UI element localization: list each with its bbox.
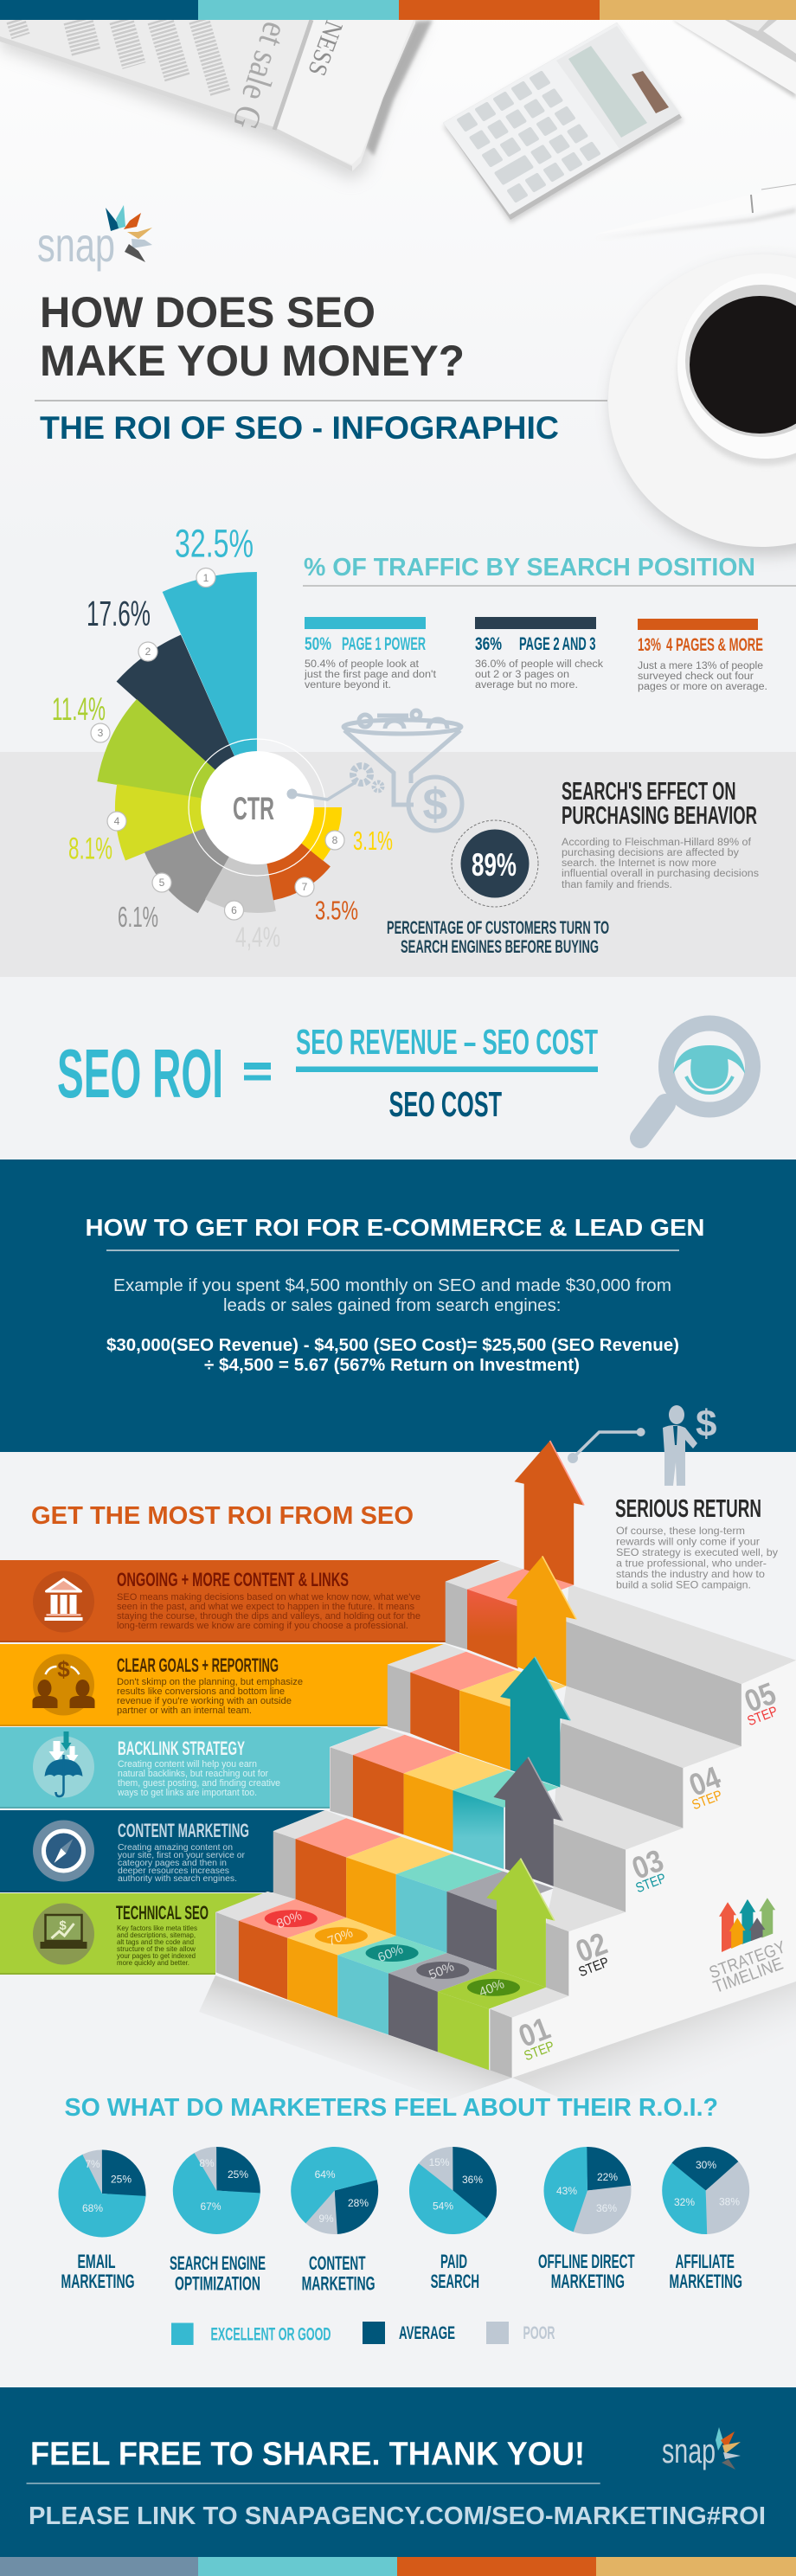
formula: SEO ROI: SEO COST <box>389 1084 502 1124</box>
banner text: backlink <box>117 1738 280 1798</box>
connector and businessman icon <box>568 1403 716 1486</box>
banner text: content marketing: Creating amazing content on <box>118 1843 233 1853</box>
chart badges <box>91 568 344 920</box>
chart badge numbers: 1 <box>203 572 209 584</box>
tread percentage labels: 80% <box>274 1908 304 1931</box>
column: 4 pages and more: 13% <box>638 635 661 655</box>
orange top arrow <box>515 1441 584 1585</box>
text: search's effect body: search. the Internet is now more <box>562 858 716 869</box>
formula: SEO ROI: SEO REVENUE – SEO COST <box>296 1022 598 1062</box>
banner text: clear goals: revenue if you're working with an outside <box>117 1696 292 1706</box>
icon: laptop <box>33 1904 94 1964</box>
tread percentage labels: 70% <box>325 1925 355 1949</box>
banner text: ongoing: long-term rewards we know are coming if you choose a professional. <box>117 1621 408 1631</box>
slate arrow <box>493 1757 562 1886</box>
pie: offline direct marketing <box>560 2162 615 2219</box>
pie value labels: 36% <box>462 2174 483 2186</box>
banner text: content marketing: CONTENT MARKETING <box>118 1820 249 1841</box>
pie value labels: 9% <box>318 2213 334 2225</box>
pie captions: SEARCH ENGINE <box>170 2252 266 2274</box>
chart percentage labels: 6.1% <box>118 901 158 933</box>
column: 4 pages and more: pages or more on average. <box>638 682 767 692</box>
column: 4 pages and more <box>638 619 767 692</box>
text: serious return: a true professional, who under- <box>616 1558 767 1570</box>
step labels <box>514 1675 780 2064</box>
green arrow <box>486 1859 555 1988</box>
banner text: technical seo: Key factors like meta titles <box>117 1924 197 1932</box>
banner text: content marketing: your site, first on your service or <box>118 1851 246 1860</box>
step 2 colours <box>296 1818 554 1970</box>
legend <box>171 2322 555 2345</box>
photo: pen <box>594 184 796 239</box>
text: serious return: stands the industry and how to <box>616 1568 765 1580</box>
stat: 89% <box>452 820 538 907</box>
strategy timeline text: TIMELINE <box>711 1955 786 1997</box>
text: search's effect body: influential overall in purchasing decisions <box>562 869 759 879</box>
pie: affiliate marketing <box>675 2160 736 2221</box>
column: page 2 and 3: 36.0% of people will check <box>475 659 603 670</box>
step labels: STEP <box>634 1871 668 1896</box>
step labels: STEP <box>523 2039 556 2064</box>
banner: ongoing <box>0 1560 500 1642</box>
heading: search's effect <box>562 778 757 830</box>
banner: technical seo <box>0 1893 264 1975</box>
pie captions: OFFLINE DIRECT <box>538 2251 635 2272</box>
icon: funnel with gears and dollar <box>287 710 462 831</box>
banner text: backlink: ways to get links are important too. <box>117 1788 257 1798</box>
step labels: 03 <box>627 1842 668 1886</box>
text: serious return: SEO strategy is executed well, by <box>616 1546 778 1558</box>
pie value labels: 25% <box>111 2174 132 2186</box>
banner: clear goals <box>0 1644 445 1726</box>
panel: footer <box>0 2387 796 2557</box>
photo: calculator <box>443 22 684 223</box>
heading: % of traffic: % OF TRAFFIC BY SEARCH POSITION <box>304 554 755 581</box>
pie value labels: 64% <box>315 2168 336 2181</box>
chart percentage labels: 17.6% <box>87 594 151 633</box>
banner text: content marketing <box>118 1820 249 1884</box>
banner text: ongoing: ONGOING + MORE CONTENT & LINKS <box>117 1569 349 1590</box>
pie captions: SEARCH <box>431 2271 479 2292</box>
pie captions: MARKETING <box>551 2271 625 2292</box>
calculation text: $30,000(SEO Revenue) - $4,500 (SEO Cost)= $25,500 (SEO Revenue) <box>106 1336 679 1355</box>
banner text: backlink: BACKLINK STRATEGY <box>118 1738 245 1759</box>
banner text: clear goals: partner or with an internal team. <box>117 1706 252 1716</box>
banner text: technical seo: your pages to get indexed <box>117 1951 196 1960</box>
panel: ROI example <box>0 1160 796 1452</box>
chart percentage labels <box>52 521 393 953</box>
chart badge numbers: 5 <box>159 877 165 889</box>
stat: 89%: 89% <box>472 847 517 883</box>
column: 4 pages and more: surveyed check out four <box>638 671 754 682</box>
chart percentage labels: 3.5% <box>315 895 358 926</box>
example text: Example if you spent $4,500 monthly on SEO and made $30,000 from <box>113 1276 671 1295</box>
chart badge numbers: 2 <box>145 646 151 658</box>
pie captions: AFFILIATE <box>675 2251 735 2272</box>
banner text: technical seo: and descriptions, sitemap, <box>117 1930 196 1939</box>
banner text: clear goals: Don't skimp on the planning, but emphasize <box>117 1677 303 1687</box>
pie value labels: 43% <box>556 2185 577 2197</box>
step labels: 01 <box>514 2010 555 2054</box>
step 5 colours <box>467 1569 574 1669</box>
title: MAKE YOU MONEY? <box>40 337 465 385</box>
pie value labels: 22% <box>597 2171 618 2183</box>
pie captions: PAID <box>440 2251 467 2272</box>
chart percentage labels: 32.5% <box>175 521 254 566</box>
pie captions: MARKETING <box>61 2271 135 2292</box>
photo: keyboard corner <box>673 20 796 99</box>
column: 4 pages and more: Just a mere 13% of people <box>638 661 763 671</box>
pie captions: OPTIMIZATION <box>175 2272 260 2295</box>
column: page 2 and 3: 36% <box>475 634 502 654</box>
chart percentage labels: 8.1% <box>68 832 112 865</box>
banner text: content marketing: authority with search engines. <box>118 1874 237 1884</box>
banner text: ongoing <box>117 1569 420 1631</box>
footer logo: snap <box>662 2432 716 2470</box>
heading: marketers: SO WHAT DO MARKETERS FEEL ABOUT THEIR R.O.I.? <box>64 2094 718 2122</box>
chart badge numbers: 7 <box>302 881 308 893</box>
banner: backlink <box>0 1727 382 1808</box>
text: percentage of customers: PERCENTAGE OF CUSTOMERS TURN TO <box>387 918 609 938</box>
banner text: backlink: natural backlinks, but reaching out for <box>118 1769 268 1779</box>
text: serious return: build a solid SEO campaign. <box>616 1578 751 1590</box>
panel heading: HOW TO GET ROI FOR E-COMMERCE & LEAD GEN <box>85 1214 704 1241</box>
pie value labels <box>82 2156 740 2225</box>
title: HOW DOES SEO <box>40 288 376 337</box>
subtitle: THE ROI OF SEO - INFOGRAPHIC <box>40 410 559 446</box>
step 1 colours <box>239 1899 546 2070</box>
step labels: STEP <box>746 1704 780 1729</box>
chart badge numbers: 6 <box>231 904 237 916</box>
column: page 2 and 3: out 2 or 3 pages on <box>475 670 569 680</box>
banner text: content marketing: deeper resources increases <box>118 1866 229 1876</box>
banner text: technical seo <box>116 1902 209 1967</box>
pie value labels: 32% <box>674 2196 695 2208</box>
pie captions: MARKETING <box>302 2272 376 2295</box>
icon: laptop: $ <box>59 1918 67 1933</box>
newspaper headline: NESS <box>302 17 348 80</box>
icon: umbrella <box>33 1731 94 1798</box>
banner text: content marketing: category pages and then in <box>118 1859 227 1868</box>
column: page 2 and 3: PAGE 2 AND 3 <box>519 634 595 654</box>
grey band <box>0 752 796 977</box>
banner text: ongoing: seen in the past, and what we expect to happen in the future. It means <box>117 1602 414 1612</box>
legend: AVERAGE <box>399 2323 455 2343</box>
chart: CTR radial <box>52 521 412 962</box>
pie captions <box>61 2251 742 2295</box>
pie captions: EMAIL <box>78 2251 116 2272</box>
text: serious return: Of course, these long-term <box>616 1525 745 1537</box>
step labels: 04 <box>684 1759 725 1803</box>
banner text: technical seo: alt tags and the code and <box>117 1937 194 1946</box>
stair treads <box>215 1561 796 2018</box>
text: serious return: rewards will only come if your <box>616 1535 760 1547</box>
text: search's effect body <box>562 838 759 890</box>
legend: EXCELLENT OR GOOD <box>211 2324 331 2345</box>
photo: newspaper <box>0 20 433 180</box>
banner text: technical seo: more quickly and better. <box>117 1958 189 1967</box>
text: search's effect body: than family and friends. <box>562 880 672 890</box>
pie value labels: 25% <box>228 2168 248 2181</box>
column: page 1 power: 50.4% of people look at <box>305 659 420 670</box>
tread ovals <box>265 1910 520 1996</box>
calculation text <box>106 1336 679 1375</box>
banner text: ongoing: SEO means making decisions based on what we know now, what we've <box>117 1592 420 1603</box>
pie value labels: 38% <box>719 2196 740 2208</box>
column: page 2 and 3: average but no more. <box>475 680 578 691</box>
pie captions: MARKETING <box>670 2271 742 2292</box>
chart badge numbers <box>98 572 338 916</box>
heading: get the most roi: GET THE MOST ROI FROM SEO <box>31 1502 414 1530</box>
pie value labels: 7% <box>85 2158 100 2170</box>
column: page 1 power: just the first page and don't <box>304 670 437 680</box>
pie value labels: 36% <box>596 2202 617 2214</box>
column: page 2 and 3 <box>475 617 603 691</box>
step 4 colours <box>410 1652 566 1770</box>
stairs 3D <box>215 1441 796 2078</box>
icon: two people and dollar <box>33 1654 95 1715</box>
newspaper sale text: et sale G <box>224 17 295 134</box>
pie value labels: 15% <box>429 2156 450 2168</box>
step 3 colours <box>353 1735 559 1869</box>
icon: two people and dollar: $ <box>57 1656 70 1682</box>
text: search's effect body: According to Fleischman-Hillard 89% of <box>562 838 752 848</box>
chart centre label: CTR <box>233 791 274 826</box>
banner text: clear goals: results like conversions and bottom line <box>117 1686 285 1697</box>
column: page 1 power: venture beyond it. <box>305 680 391 691</box>
logo: snap: snap <box>37 217 115 272</box>
pie: email marketing <box>73 2164 132 2223</box>
banner text: clear goals <box>117 1654 303 1716</box>
tread percentage labels: 40% <box>477 1976 506 2000</box>
footer link: PLEASE LINK TO SNAPAGENCY.COM/SEO-MARKETING#ROI <box>29 2502 766 2530</box>
pie captions: CONTENT <box>309 2252 366 2274</box>
chart percentage labels: 11.4% <box>52 691 106 727</box>
formula: SEO ROI <box>57 1022 598 1124</box>
column: page 1 power <box>304 617 437 691</box>
pie: paid search <box>422 2160 484 2221</box>
pie value labels: 8% <box>199 2157 215 2169</box>
pie: search engine optimization <box>187 2161 247 2220</box>
chart badge numbers: 8 <box>332 834 338 846</box>
chart percentage labels: 3.1% <box>353 825 393 856</box>
pie: content marketing <box>304 2160 365 2221</box>
pie value labels: 68% <box>82 2202 103 2214</box>
pie value labels: 28% <box>348 2197 369 2209</box>
text: serious return <box>615 1495 778 1590</box>
tread percentage labels: 50% <box>427 1959 456 1982</box>
legend: POOR <box>523 2323 555 2343</box>
stair risers <box>215 1582 741 2078</box>
photo: coffee cup <box>608 254 796 556</box>
column: page 1 power: 50% <box>305 634 331 654</box>
banner: content marketing <box>0 1810 325 1892</box>
banner text: ongoing: staying the course, through the dips and valleys, and holding out for the <box>117 1611 420 1622</box>
chart badge numbers: 4 <box>114 815 120 827</box>
chart percentage labels: 4,4% <box>235 922 280 953</box>
connector and businessman icon: $ <box>696 1403 716 1445</box>
icon: strategy timeline arrows <box>719 1898 775 1952</box>
icon: bank <box>33 1571 94 1632</box>
stair white side <box>512 1661 796 2078</box>
banner text: backlink: Creating content will help you earn <box>118 1759 257 1770</box>
banner text: backlink: them, guest posting, and finding creative <box>118 1778 280 1789</box>
teal arrow <box>500 1657 570 1787</box>
footer thanks: FEEL FREE TO SHARE. THANK YOU! <box>30 2437 585 2473</box>
icon: compass <box>33 1821 94 1881</box>
amber arrow <box>507 1556 576 1686</box>
text: percentage of customers: SEARCH ENGINES BEFORE BUYING <box>401 937 599 957</box>
icon: funnel with gears and dollar: $ <box>423 780 448 830</box>
formula: SEO ROI: SEO ROI <box>57 1035 223 1112</box>
step labels: STEP <box>577 1955 611 1980</box>
tread percentage labels: 60% <box>376 1942 405 1965</box>
staircase floor shadow <box>199 1975 796 2103</box>
calculation text: ÷ $4,500 = 5.67 (567% Return on Investment) <box>204 1356 580 1375</box>
icon: magnifier with eye <box>640 1023 753 1138</box>
example text <box>113 1276 671 1315</box>
pie value labels: 54% <box>433 2200 453 2212</box>
banner text: technical seo: structure of the site allow <box>117 1944 196 1953</box>
text: search's effect body: purchasing decisions are affected by <box>562 848 739 858</box>
tread percentage labels <box>274 1908 506 2000</box>
title <box>40 288 465 385</box>
strategy timeline text <box>707 1937 788 1997</box>
example text: leads or sales gained from search engines: <box>223 1296 561 1315</box>
step labels: 02 <box>571 1925 612 1969</box>
top colour bar <box>0 0 796 20</box>
bottom colour bar <box>0 2557 796 2576</box>
pie value labels: 30% <box>696 2159 716 2171</box>
banner text: technical seo: TECHNICAL SEO <box>116 1902 209 1924</box>
pie value labels: 67% <box>200 2200 221 2213</box>
step labels: STEP <box>690 1788 724 1813</box>
banner text: clear goals: CLEAR GOALS + REPORTING <box>117 1654 279 1676</box>
text: percentage of customers <box>387 918 609 957</box>
step labels: 05 <box>740 1675 780 1719</box>
column: page 1 power: PAGE 1 POWER <box>342 634 426 654</box>
chart badge numbers: 3 <box>98 727 104 739</box>
